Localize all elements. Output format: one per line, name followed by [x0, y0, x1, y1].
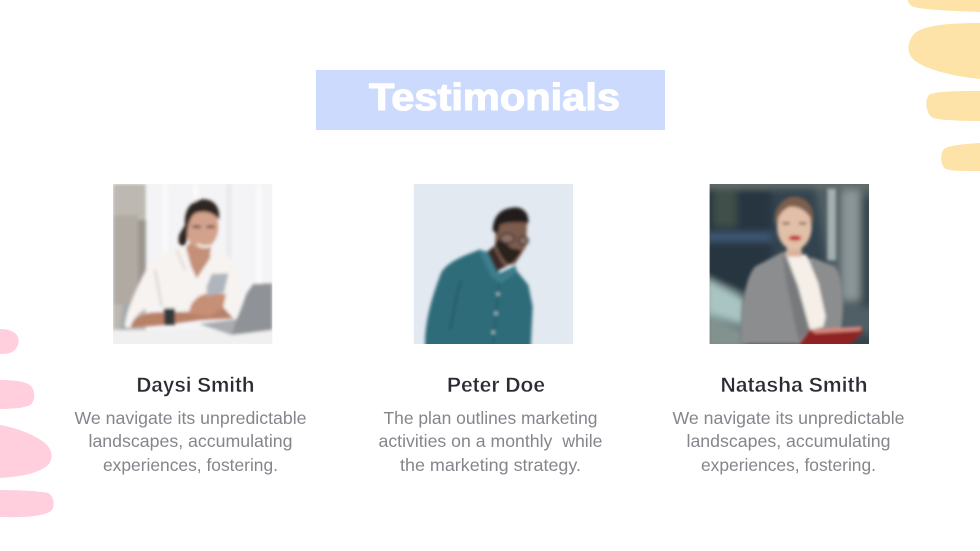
name: Natasha Smith — [720, 374, 868, 397]
photo: woman with red folder — [710, 184, 869, 344]
description: We navigate its unpredictable — [672, 408, 904, 428]
description — [74, 408, 306, 475]
decoration: yellow brush strokes — [908, 0, 980, 171]
description: the marketing strategy. — [400, 455, 581, 475]
title banner — [316, 70, 665, 130]
testimonial: Peter Doe — [378, 184, 602, 475]
description: experiences, fostering. — [103, 455, 278, 475]
photo: woman with phone and laptop — [113, 184, 272, 345]
title: Testimonials — [369, 77, 620, 119]
description: landscapes, accumulating — [686, 431, 890, 451]
photo: man in teal shirt — [414, 184, 573, 350]
description: We navigate its unpredictable — [74, 408, 306, 428]
description — [672, 408, 904, 475]
testimonial: Daysi Smith — [74, 184, 306, 475]
description: The plan outlines marketing — [384, 408, 598, 428]
description: experiences, fostering. — [701, 455, 876, 475]
description — [378, 408, 602, 475]
description: activities on a monthly while — [378, 431, 602, 451]
name: Daysi Smith — [136, 374, 254, 397]
description: landscapes, accumulating — [88, 431, 292, 451]
name: Peter Doe — [447, 374, 545, 397]
decoration: pink brush strokes — [0, 329, 54, 517]
testimonial: Natasha Smith — [672, 180, 904, 475]
